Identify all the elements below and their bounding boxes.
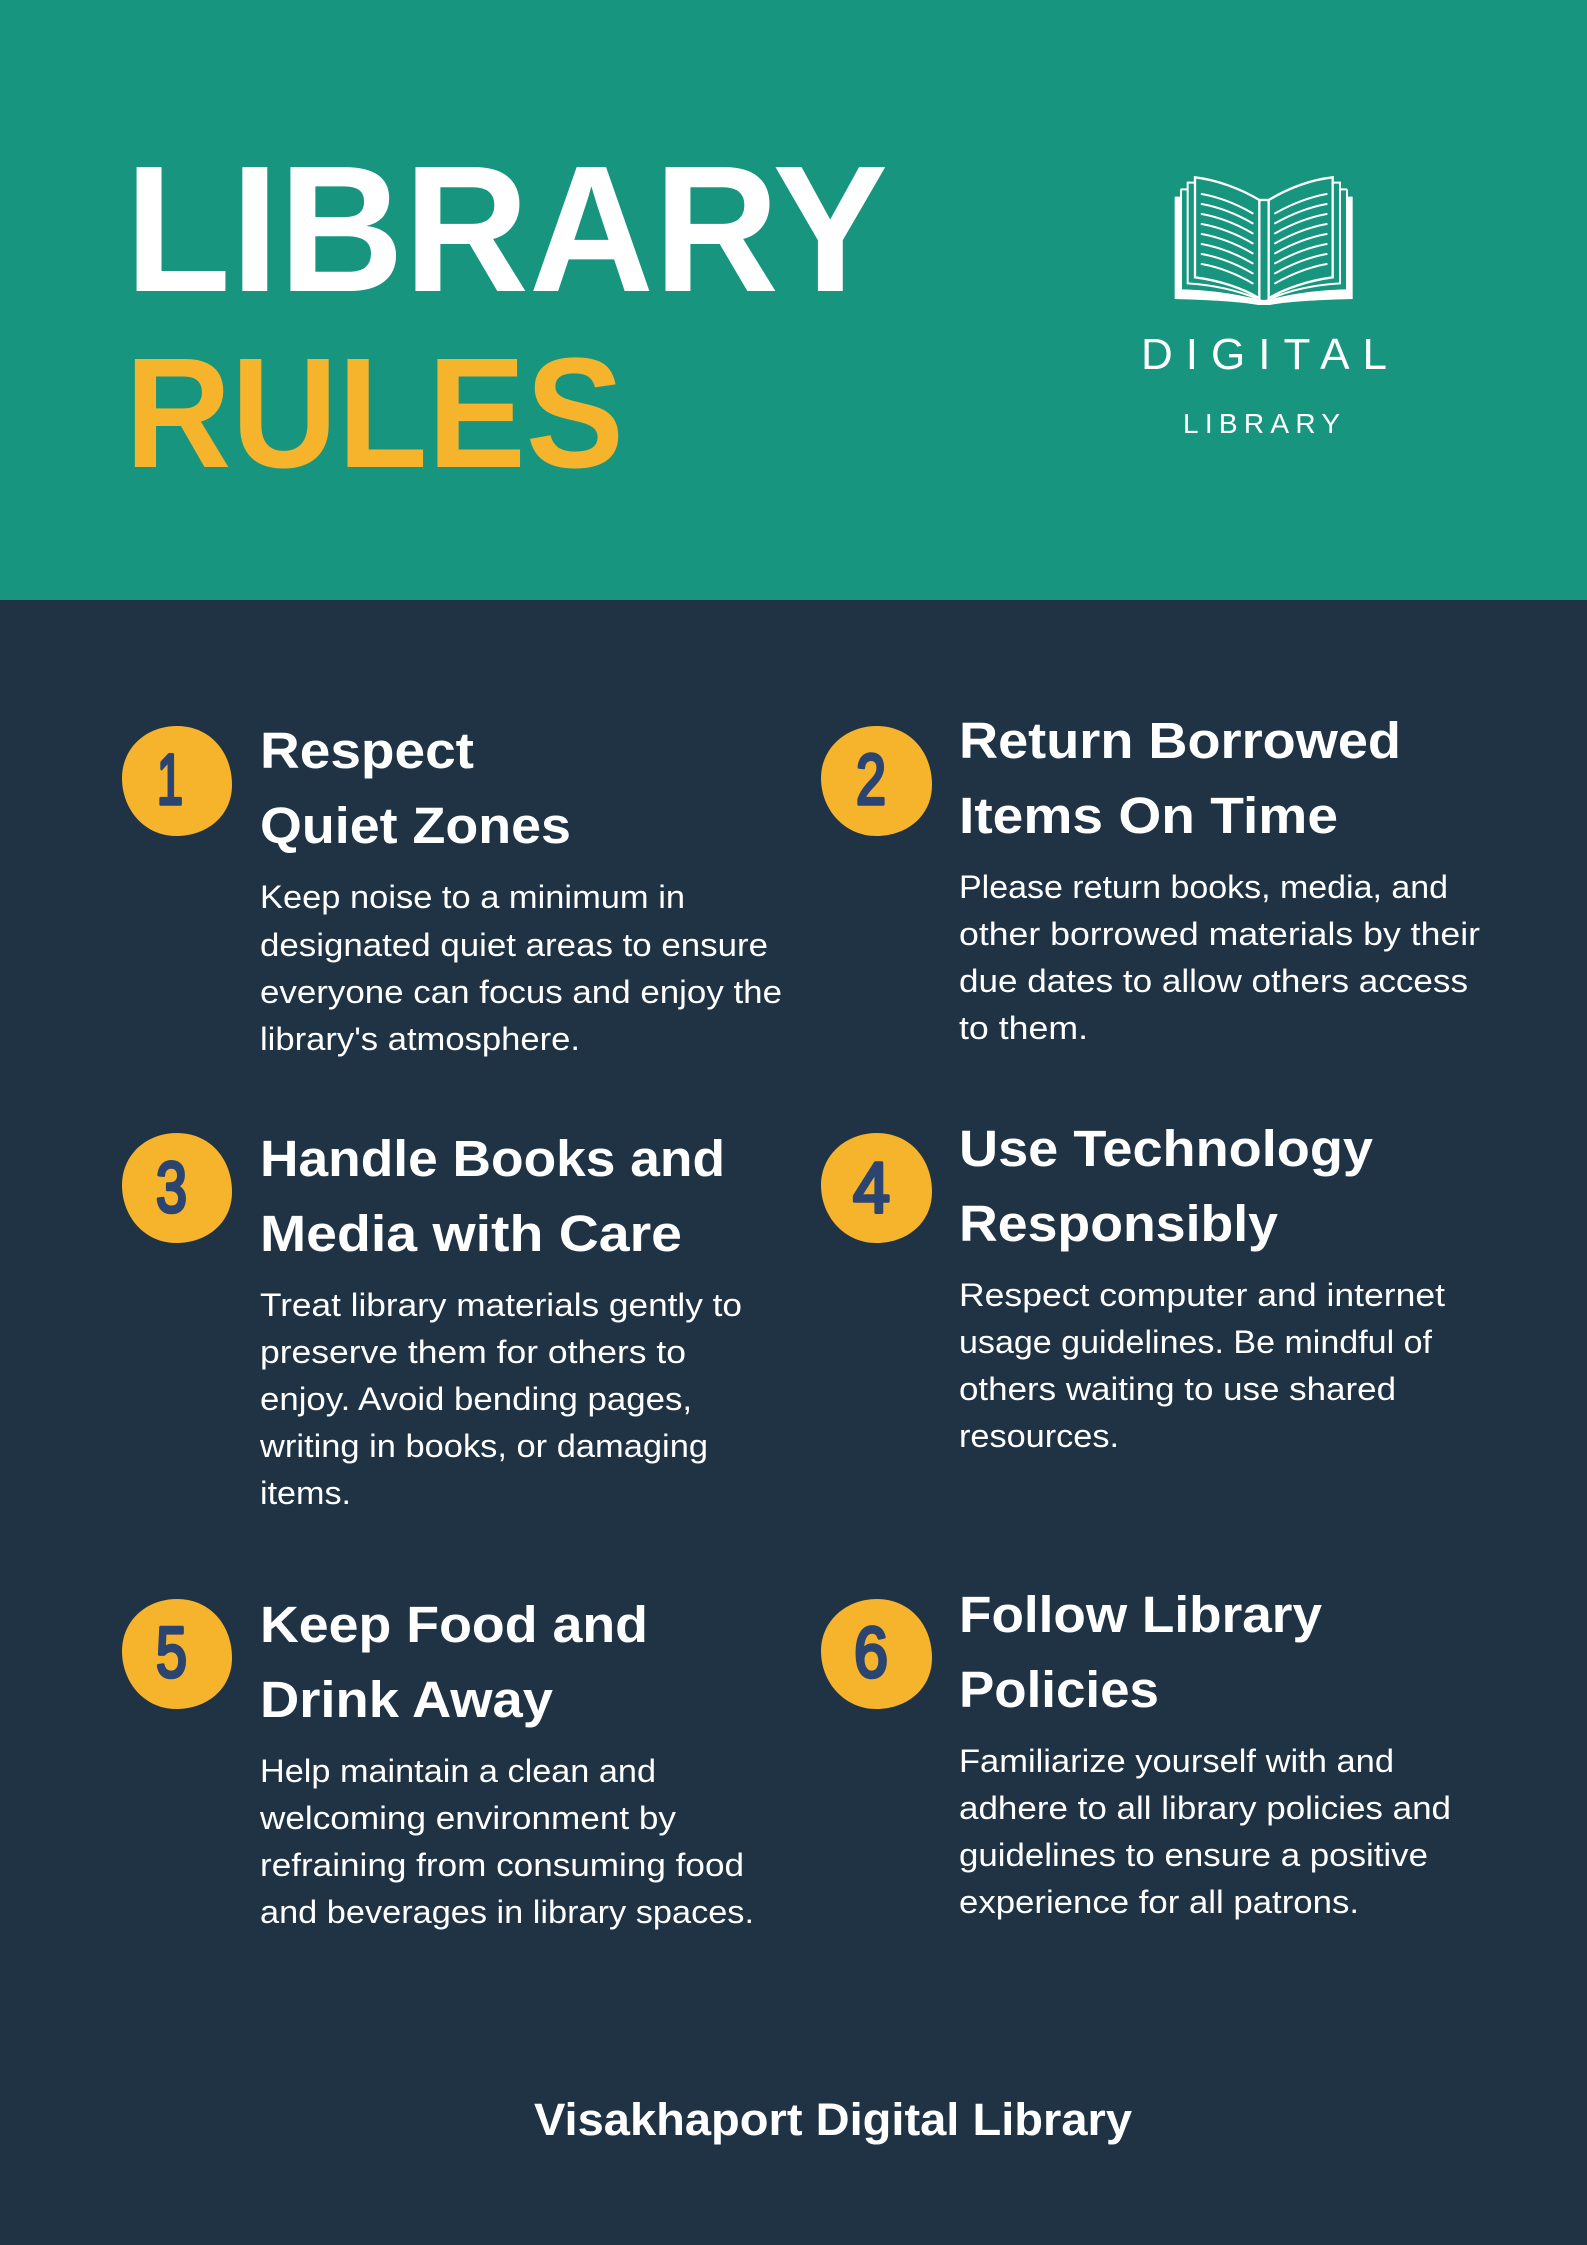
rule 1: respect quiet zones — [122, 722, 782, 1057]
title: RULES: RULES — [125, 326, 624, 501]
title: LIBRARY: LIBRARY — [125, 129, 888, 330]
body text: Help maintain a clean and — [260, 1753, 656, 1789]
number badge 5 — [122, 1599, 232, 1709]
rule 6: follow library policies — [821, 1586, 1451, 1920]
number badge 3: 3 — [156, 1149, 187, 1228]
body text — [959, 1277, 1445, 1454]
body text — [259, 1753, 754, 1930]
heading: Use Technology — [959, 1120, 1374, 1177]
body text — [959, 869, 1480, 1046]
body text: Keep noise to a minimum in — [260, 879, 685, 915]
rule 5: keep food and drink away — [122, 1596, 754, 1930]
number badge 5: 5 — [156, 1614, 187, 1693]
body text: Treat library materials gently to — [260, 1287, 742, 1323]
body text: Familiarize yourself with and — [959, 1743, 1394, 1779]
rule 4: use technology responsibly — [821, 1120, 1445, 1454]
number badge 4: 4 — [853, 1149, 890, 1228]
logo word: LIBRARY: LIBRARY — [1183, 408, 1340, 439]
heading — [959, 1586, 1323, 1718]
body text: guidelines to ensure a positive — [959, 1837, 1428, 1873]
heading: Handle Books and — [260, 1130, 725, 1187]
heading: Return Borrowed — [959, 712, 1401, 769]
body text: other borrowed materials by their — [959, 916, 1480, 952]
body text: to them. — [959, 1010, 1088, 1046]
heading: Drink Away — [260, 1671, 554, 1728]
number badge 6 — [821, 1599, 932, 1709]
number badge 4 — [821, 1133, 932, 1243]
logo: digital library — [1141, 177, 1387, 439]
body text: welcoming environment by — [259, 1800, 676, 1836]
body text: enjoy. Avoid bending pages, — [260, 1381, 692, 1417]
body text: everyone can focus and enjoy the — [260, 974, 782, 1010]
heading — [959, 1120, 1374, 1252]
number badge 2: 2 — [856, 741, 886, 820]
heading: Media with Care — [260, 1205, 682, 1262]
logo word: DIGITAL: DIGITAL — [1141, 330, 1387, 379]
heading — [260, 1596, 648, 1728]
heading: Follow Library — [959, 1586, 1323, 1643]
footer: organisation name: Visakhaport Digital Library — [534, 2094, 1132, 2145]
body text: adhere to all library policies and — [959, 1790, 1451, 1826]
body text — [259, 1287, 742, 1511]
body text — [959, 1743, 1451, 1920]
heading: Respect — [260, 722, 474, 779]
body text: preserve them for others to — [260, 1334, 686, 1370]
rule 3: handle books and media with care — [122, 1130, 742, 1511]
number badge 3 — [122, 1133, 232, 1243]
body text — [260, 879, 782, 1057]
heading — [260, 1130, 725, 1262]
number badge 1: 1 — [157, 741, 183, 820]
number badge 2 — [821, 726, 932, 836]
body text: refraining from consuming food — [260, 1847, 744, 1883]
body text: Respect computer and internet — [959, 1277, 1445, 1313]
body text: experience for all patrons. — [959, 1884, 1359, 1920]
body text: usage guidelines. Be mindful of — [959, 1324, 1432, 1360]
heading: Responsibly — [959, 1195, 1279, 1252]
icon: open book — [1175, 177, 1353, 305]
body text: due dates to allow others access — [959, 963, 1468, 999]
heading: Quiet Zones — [260, 797, 571, 854]
body text: others waiting to use shared — [959, 1371, 1396, 1407]
number badge 1 — [122, 726, 232, 836]
heading — [260, 722, 571, 854]
body text: library's atmosphere. — [260, 1021, 580, 1057]
body text: resources. — [959, 1418, 1119, 1454]
body text: Please return books, media, and — [959, 869, 1448, 905]
body text: items. — [260, 1475, 351, 1511]
heading: Keep Food and — [260, 1596, 648, 1653]
number badge 6: 6 — [854, 1614, 888, 1693]
body text: designated quiet areas to ensure — [260, 927, 768, 963]
heading: Policies — [959, 1661, 1159, 1718]
rule 2: return borrowed items on time — [821, 712, 1480, 1046]
header band — [0, 0, 1587, 600]
body text: writing in books, or damaging — [259, 1428, 708, 1464]
heading: Items On Time — [959, 787, 1338, 844]
heading — [959, 712, 1401, 844]
body text: and beverages in library spaces. — [260, 1894, 754, 1930]
